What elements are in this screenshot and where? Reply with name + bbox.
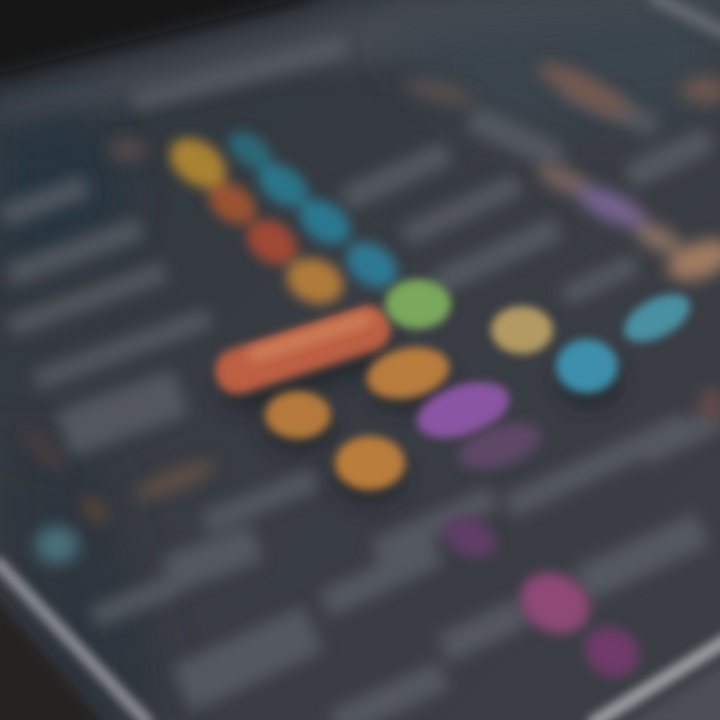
blue dot <box>556 339 618 393</box>
upper-right sheet edge <box>650 0 720 35</box>
orange dot <box>265 391 331 439</box>
dim purple pill <box>453 414 547 478</box>
highlight on the long bar <box>246 310 374 364</box>
green dot <box>385 279 451 329</box>
teal pill series <box>222 124 406 297</box>
yellow dot <box>491 306 553 354</box>
orange pill <box>362 340 454 406</box>
shadows under the bars <box>218 324 622 504</box>
dim coloured marks upper right <box>20 54 720 527</box>
red-orange long bar <box>209 300 397 400</box>
dark top-left table corner <box>0 0 720 125</box>
lower-left table corner and sheet edge <box>0 560 150 720</box>
small pale blue dot, lower left <box>35 526 79 564</box>
orange dot lower <box>335 436 405 490</box>
purple pill <box>410 371 516 449</box>
magenta pill series, lower right <box>437 508 648 686</box>
orange and red pill series <box>161 128 350 312</box>
central cluster of bars and dots <box>209 279 698 504</box>
blue pill <box>616 284 698 352</box>
lower-right sheet edge <box>590 638 720 720</box>
